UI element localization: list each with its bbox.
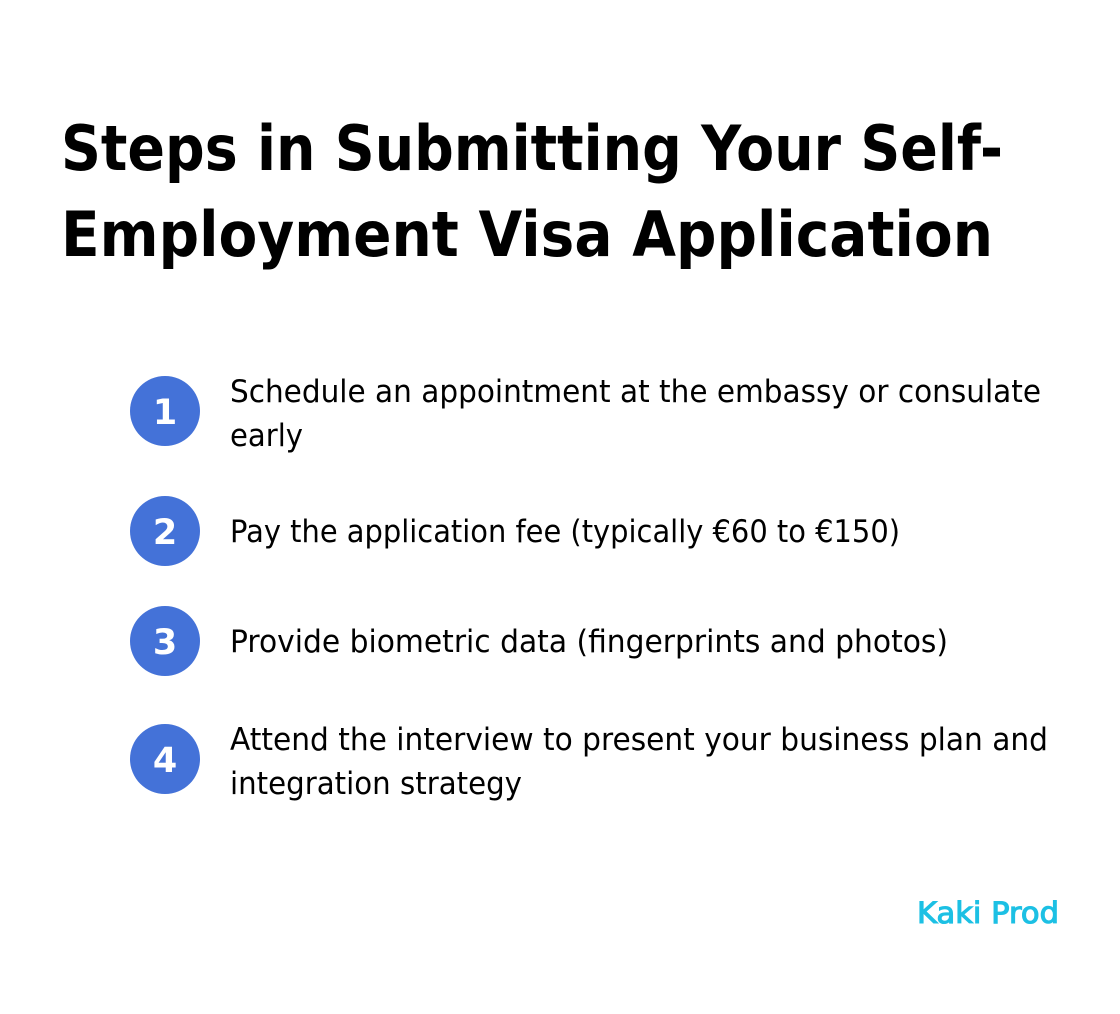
title: Employment Visa Application — [61, 198, 993, 271]
step 1 text — [230, 374, 1041, 454]
step 2 text: Pay the application fee (typically €60 to €150) — [230, 514, 900, 550]
step 1 badge: 1 — [153, 393, 177, 433]
step 4 badge — [130, 724, 200, 794]
step 3 badge — [130, 606, 200, 676]
step 4 text: integration strategy — [230, 766, 522, 802]
step 3 text: Provide biometric data (fingerprints and photos) — [230, 624, 948, 660]
step 1 text: early — [230, 418, 303, 454]
title: Steps in Submitting Your Self- — [61, 112, 1003, 185]
step 2 — [130, 496, 900, 566]
step 4 — [130, 722, 1048, 802]
step 2 badge: 2 — [153, 513, 177, 553]
step 1 badge — [130, 376, 200, 446]
step 4 text: Attend the interview to present your business plan and — [230, 722, 1048, 758]
step 4 text — [230, 722, 1048, 802]
step 1 — [130, 374, 1041, 454]
step 3 badge: 3 — [153, 623, 177, 663]
title — [61, 112, 1003, 271]
logo: Kaki Prod: Kaki Prod — [917, 896, 1059, 930]
step 1 text: Schedule an appointment at the embassy or consulate — [230, 374, 1041, 410]
step 4 badge: 4 — [153, 741, 177, 781]
step 3 — [130, 606, 948, 676]
step 2 badge — [130, 496, 200, 566]
